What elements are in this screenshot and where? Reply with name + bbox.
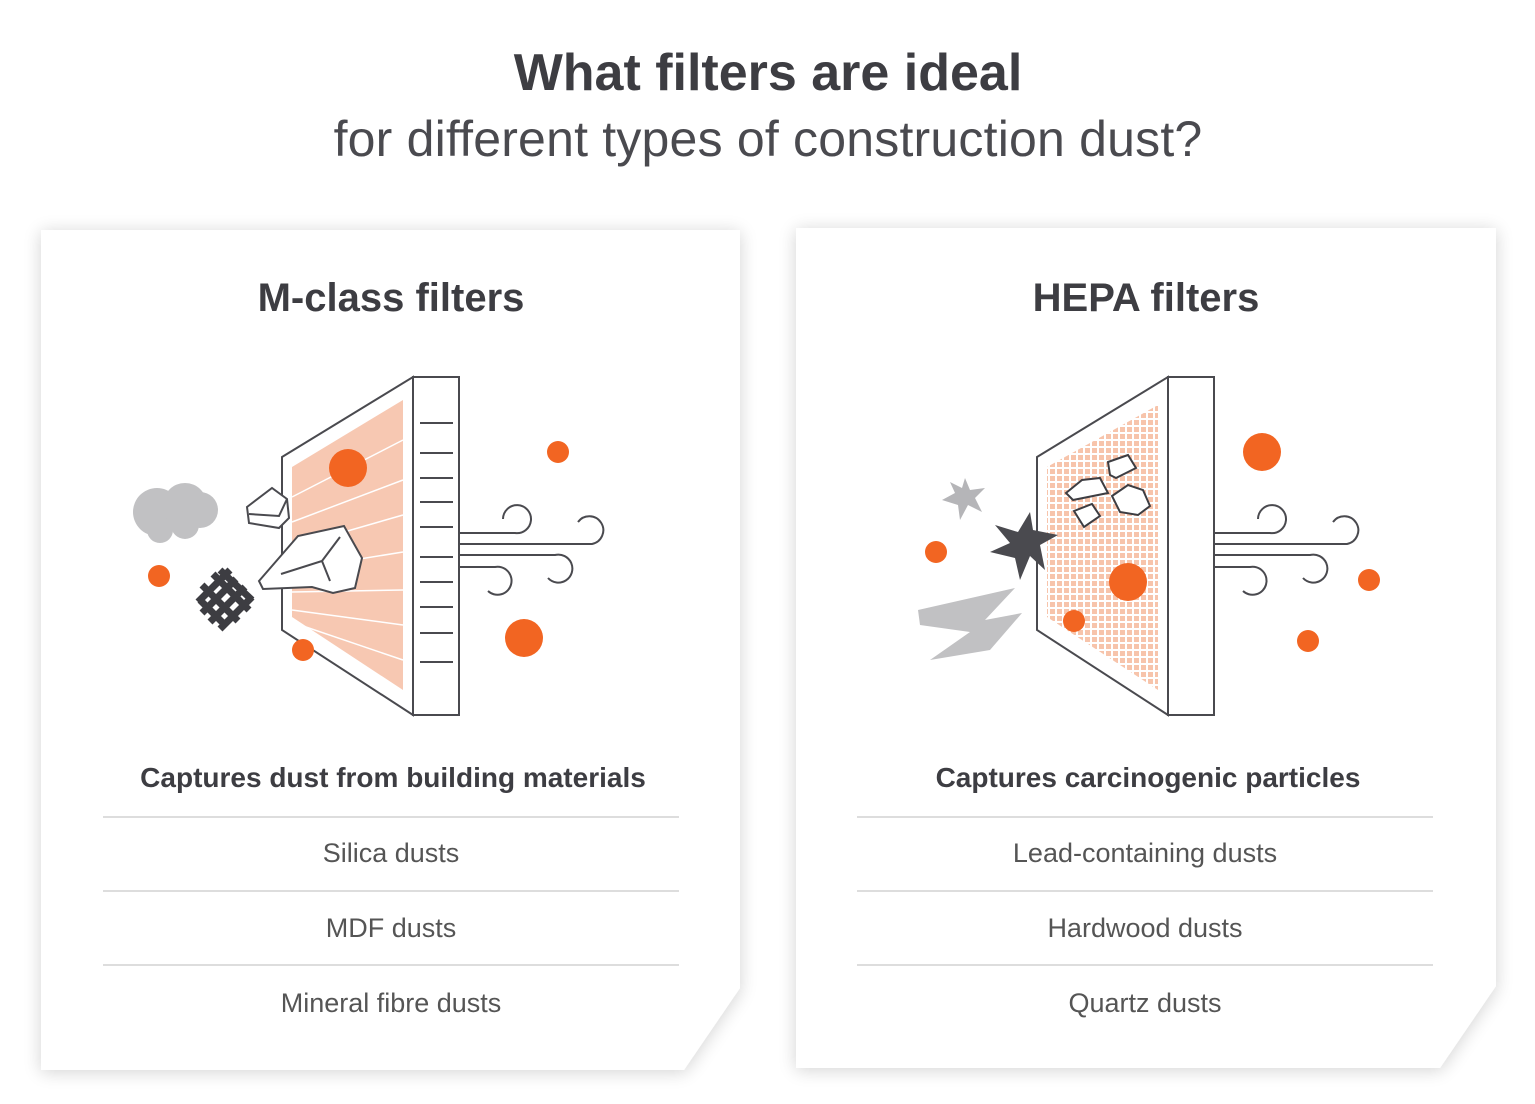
panel: HEPA [796, 228, 1496, 1068]
list: M-class dusts: Silica dusts [323, 838, 459, 868]
illustration: HEPA filter [918, 377, 1380, 715]
list: M-class dusts [281, 838, 501, 1018]
heading: M-class filters: M-class filters [258, 276, 524, 320]
heading: HEPA filters: HEPA filters [1033, 276, 1259, 320]
panel: M-class [41, 230, 740, 1070]
list: HEPA dusts [1013, 838, 1277, 1018]
title [334, 44, 1202, 167]
illustration: M-class filter [133, 377, 603, 715]
list: HEPA dusts: Quartz dusts [1068, 988, 1222, 1018]
list: M-class dusts: Mineral fibre dusts [281, 988, 501, 1018]
list: M-class dusts: MDF dusts [326, 913, 456, 943]
list: HEPA dusts: Lead-containing dusts [1013, 838, 1277, 868]
title: What filters are ideal [514, 44, 1022, 102]
list: HEPA dusts: Hardwood dusts [1047, 913, 1243, 943]
subheading: Captures carcinogenic particles [936, 762, 1360, 793]
title: for different types of construction dust? [334, 111, 1202, 167]
subheading: Captures dust from building materials [140, 762, 646, 793]
